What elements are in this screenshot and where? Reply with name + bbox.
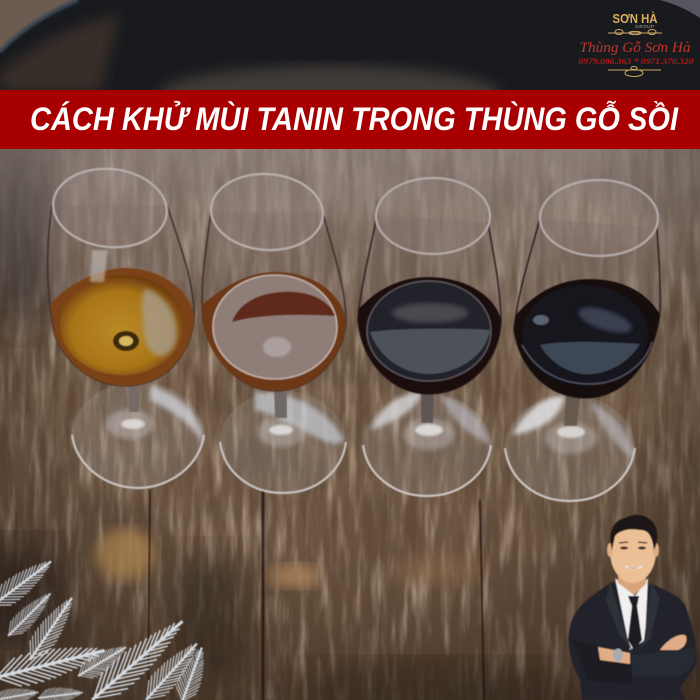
dark barrel rim at top — [0, 0, 700, 122]
logo shop name: Thùng Gỗ Sơn Hà — [580, 40, 690, 56]
lapels — [606, 582, 660, 652]
crossed sleeve — [630, 648, 695, 676]
white fern decoration — [0, 552, 212, 700]
glass 4: darkest wine — [505, 180, 660, 501]
darkest wine liquid — [514, 279, 660, 398]
shirt — [615, 578, 648, 650]
glass 2: light brown whisky — [202, 170, 346, 493]
foot of glass 4 — [505, 395, 635, 501]
watch — [613, 648, 623, 662]
logo phone numbers: 0979.086.363 * 0971.370.320 — [578, 57, 694, 66]
glass 3: dark red-brown whisky — [358, 178, 501, 496]
presenter in suit — [569, 515, 697, 700]
foot of glass 1 — [72, 382, 204, 488]
dark red-brown liquid — [358, 277, 501, 394]
light brown liquid — [202, 272, 346, 391]
hair — [610, 515, 657, 550]
hand left with wrist — [598, 647, 630, 664]
logo: Son Ha group — [578, 11, 694, 76]
tie — [628, 596, 642, 650]
ornament lower — [608, 66, 661, 76]
hand right — [660, 635, 687, 650]
glass 1: amber whisky — [48, 163, 204, 488]
eyes and mouth — [619, 542, 647, 569]
foot of glass 3 — [363, 392, 491, 496]
red title banner — [0, 90, 700, 149]
foot of glass 2 — [220, 390, 346, 493]
neck and face — [618, 570, 646, 595]
suit body — [569, 582, 697, 700]
amber liquid — [50, 268, 194, 386]
logo group label: GROUP — [635, 24, 655, 29]
ornament upper — [608, 30, 662, 35]
logo brand name: SƠN HÀ — [612, 11, 658, 26]
